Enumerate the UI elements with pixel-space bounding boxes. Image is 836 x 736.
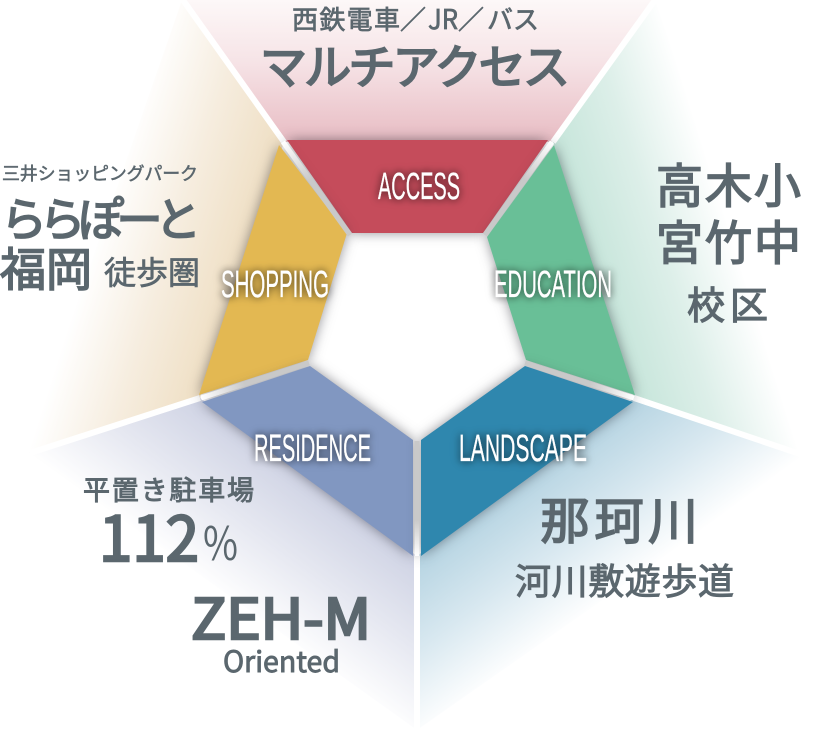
text block: shopping: 徒歩圏 [104, 248, 200, 294]
text block: access: 西鉄電車 [292, 0, 400, 37]
segment: shopping [199, 145, 347, 395]
text block: shopping [0, 160, 201, 300]
label: SHOPPING: SHOPPING [221, 264, 329, 306]
panel: shopping background wedge [25, 0, 284, 452]
text block: shopping: 福岡 [0, 234, 92, 300]
text block: landscape [515, 482, 734, 605]
segment: access [287, 140, 548, 233]
text block: residence: ZEH-M [191, 575, 371, 656]
panel: access background wedge [185, 0, 655, 142]
panel: landscape background wedge [417, 398, 808, 730]
text block: access: ／ [400, 0, 426, 37]
text block: education [656, 148, 801, 330]
text block: residence: 平置き駐車場 [83, 469, 254, 508]
text block: education: 宮竹中 [656, 205, 801, 274]
segment: landscape [421, 366, 633, 556]
text block: residence: 112 [99, 489, 199, 579]
text block: residence: % [203, 508, 238, 574]
text block: access: ／ [458, 0, 484, 37]
text block: residence [83, 469, 371, 681]
label: LANDSCAPE: LANDSCAPE [459, 428, 587, 470]
segment: education [487, 145, 635, 395]
label: EDUCATION: EDUCATION [494, 264, 612, 306]
text block: residence: Oriented [223, 639, 340, 681]
text block: landscape: 那珂川 [540, 482, 698, 554]
text block: shopping: ららぽーと [1, 184, 201, 250]
label: RESIDENCE: RESIDENCE [254, 428, 371, 470]
text block: access: マルチアクセス [260, 29, 570, 98]
panel: education background wedge [553, 0, 810, 456]
text block: shopping: 三井ショッピングパーク [2, 160, 198, 186]
panel: residence background wedge [28, 398, 417, 730]
label: ACCESS: ACCESS [378, 166, 460, 208]
text block: access: バス [487, 0, 539, 37]
segment: residence [202, 366, 413, 556]
text block: education: 校区 [687, 275, 768, 330]
text block: landscape: 河川敷遊歩道 [515, 553, 734, 605]
gray dividers between segments [201, 142, 634, 556]
text block: education: 高木小 [656, 148, 801, 217]
